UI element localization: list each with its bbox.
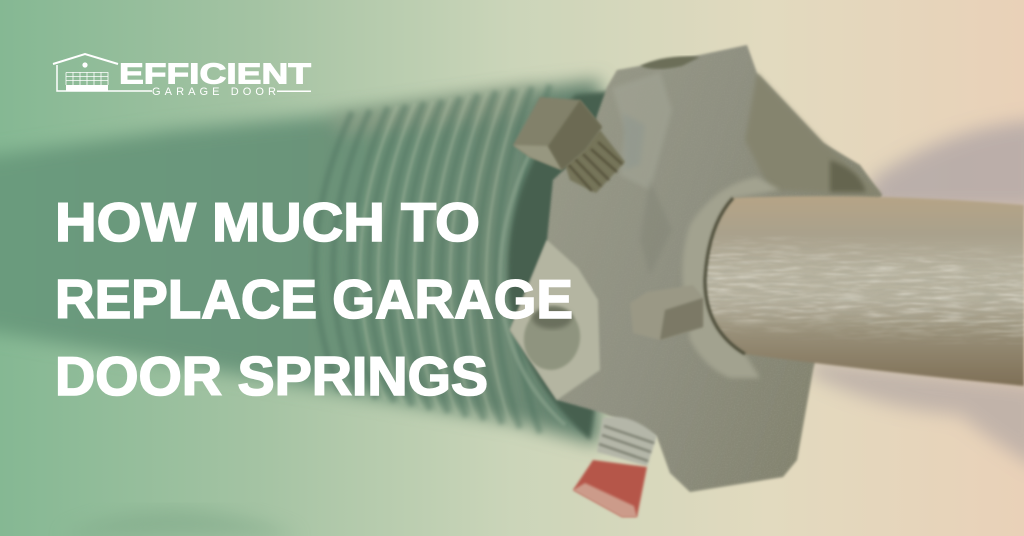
logo tagline: GARAGE DOOR	[152, 86, 276, 98]
collar around tube	[682, 177, 780, 378]
torsion shaft tube	[690, 196, 1024, 386]
logo	[53, 54, 311, 98]
icon: garage house	[53, 54, 152, 91]
square head bolt upper	[513, 97, 625, 193]
spring coils dark	[315, 85, 550, 433]
spring body	[0, 80, 620, 445]
title: DOOR SPRINGS	[55, 345, 488, 407]
title: REPLACE GARAGE	[55, 268, 573, 330]
cast spring cone fitting	[510, 45, 882, 492]
lug on fitting	[630, 285, 703, 340]
title: HOW MUCH TO	[55, 191, 480, 253]
fitting ear around hole	[510, 240, 600, 400]
spring top tan edge	[330, 86, 540, 135]
blurred shadows on the wall	[60, 120, 1024, 536]
red tipped set screw lower	[573, 417, 657, 517]
title	[55, 191, 573, 407]
logo wordmark: EFFICIENT	[119, 58, 311, 90]
spring coil highlights	[360, 88, 523, 426]
fitting through-hole	[519, 302, 585, 374]
spring dark end cavity	[508, 90, 620, 440]
